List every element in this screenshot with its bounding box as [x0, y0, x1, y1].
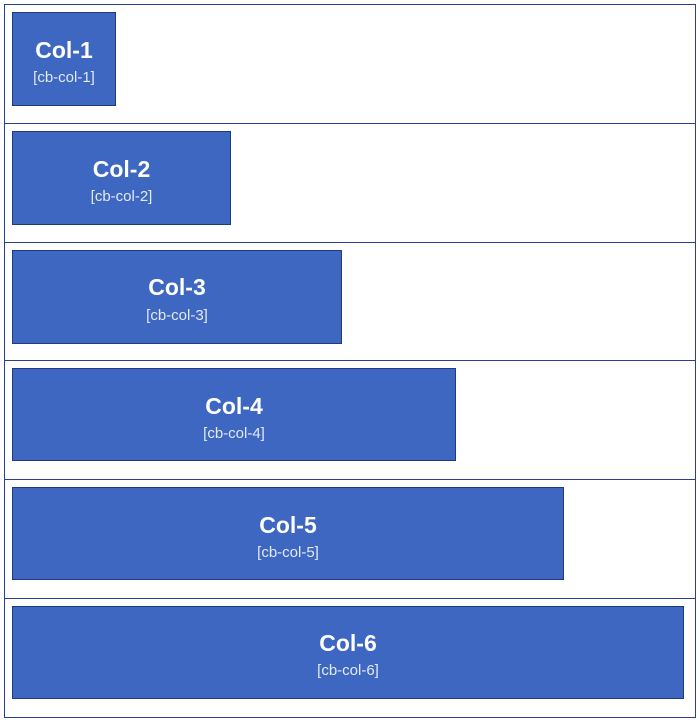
bar: Col-6: Col-6 — [319, 630, 377, 656]
bar: Col-5 — [12, 487, 564, 580]
row frame 1 — [4, 4, 696, 124]
bar: Col-4: [cb-col-4] — [203, 425, 265, 442]
bar: Col-1 — [12, 12, 116, 106]
bar: Col-2: [cb-col-2] — [91, 188, 152, 205]
bar: Col-4: Col-4 — [205, 393, 263, 419]
row frame 3 — [4, 242, 696, 361]
bar: Col-4 — [12, 368, 456, 461]
bar: Col-1: Col-1 — [35, 37, 93, 63]
bar: Col-2 — [12, 131, 231, 225]
bar: Col-6: [cb-col-6] — [317, 662, 379, 679]
bar: Col-3: [cb-col-3] — [146, 307, 208, 324]
bar: Col-2: Col-2 — [93, 156, 150, 182]
bar: Col-5: [cb-col-5] — [257, 544, 319, 561]
bar: Col-3 — [12, 250, 342, 344]
row frame 5 — [4, 479, 696, 599]
row frame 4 — [4, 360, 696, 480]
bar: Col-1: [cb-col-1] — [33, 69, 95, 86]
bar: Col-6 — [12, 606, 684, 699]
row frame 6 — [4, 598, 696, 718]
bar: Col-3: Col-3 — [148, 274, 206, 300]
row frame 2 — [4, 123, 696, 243]
bar: Col-5: Col-5 — [259, 512, 317, 538]
